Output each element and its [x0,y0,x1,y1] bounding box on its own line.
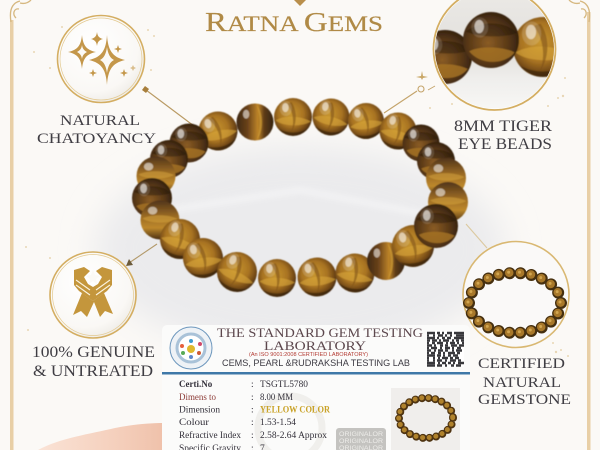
certificate bracelet photo [391,388,460,450]
certificate QR code [427,331,464,367]
marble surface [95,145,505,355]
certificate data table: 1.53-1.54 [260,418,296,428]
certificate data table [179,379,330,450]
original stamp: ORIGINALOR [339,438,383,445]
original stamp: ORIGINALOR [339,431,383,438]
icon: medal with ribbon [73,267,113,317]
corner ornament: top left [10,0,31,22]
label: 8mm tiger eye beads: EYE BEADS [458,136,552,153]
badge: natural chatoyancy [58,16,144,102]
label: 100% genuine and untreated: 100% GENUINE [32,344,155,361]
icon: sparkling stars [68,32,136,85]
certificate logo [170,327,212,369]
connector: genuine to bracelet [126,244,157,266]
label: natural chatoyancy [37,113,156,147]
certificate heading: (An ISO 9001:2008 CERTIFIED LABORATORY) [249,352,368,358]
label: certified natural gemstone: GEMSTONE [478,392,571,408]
label: certified natural gemstone: NATURAL [483,375,561,391]
certificate watermark seal [258,396,322,450]
certificate divider [161,372,470,374]
close-up beads [435,11,554,85]
hand finger holding certificate [38,423,165,450]
certificate data table: : [251,406,254,416]
connector: chatoyancy to bracelet [142,86,194,126]
certificate heading [217,325,423,368]
gold splatter decoration [25,26,569,357]
frame: left gold border [10,20,14,450]
label: certified natural gemstone [478,356,571,408]
title: Ratna Gems: RATNA GEMS [205,7,383,37]
certificate data table: Dimens to [179,393,216,403]
certificate data table: : [251,380,254,390]
label: certified natural gemstone: CERTIFIED [478,356,565,372]
connector: certified to bracelet [466,224,487,248]
badge: 8mm tiger eye close-up [432,0,556,111]
original stamp [336,428,386,450]
certificate data table: : [251,418,254,428]
frame: right gold border [587,12,590,450]
mini bracelet [468,272,561,333]
certificate data table: Colour [179,418,210,428]
label: 100% genuine and untreated [32,344,155,380]
label: 8mm tiger eye beads: 8MM TIGER [454,118,553,135]
certificate card [161,325,470,450]
connector: tiger eye beads to bracelet [384,71,435,113]
certificate data table: Dimension [179,406,220,416]
certificate heading: LABORATORY [264,338,367,353]
certificate data table: TSGTL5780 [260,380,308,390]
certificate data table: 8.00 MM [260,393,293,403]
certificate data table: 2.58-2.64 Approx [260,431,327,441]
label: 8mm tiger eye beads [454,118,553,153]
certificate heading: THE STANDARD GEM TESTING [217,325,423,340]
certificate data table: Certi.No [179,379,213,389]
badge: genuine medal [50,252,136,338]
bracelet: large tiger eye beads [132,96,468,299]
brand diamond ornament [294,0,306,6]
certificate heading: CEMS, PEARL &RUDRAKSHA TESTING LAB [222,358,410,368]
certificate data table: : [251,431,254,441]
certificate data table: : [251,393,254,403]
label: natural chatoyancy: CHATOYANCY [37,131,156,147]
label: natural chatoyancy: NATURAL [60,113,140,129]
certificate data table: YELLOW COLOR [260,406,330,416]
certificate data table: Refractive Index [179,430,241,441]
corner ornament: top right [569,0,590,22]
badge: certified mini bracelet [463,242,569,348]
label: 100% genuine and untreated: & UNTREATED [33,363,153,380]
